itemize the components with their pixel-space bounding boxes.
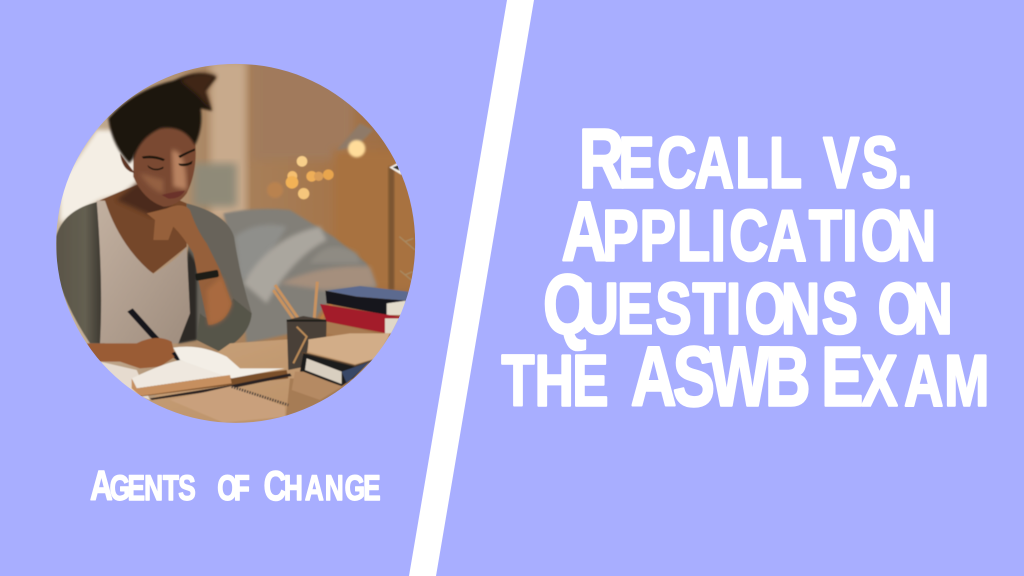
brand caption: C: [264, 461, 286, 509]
neck and chest: [97, 183, 187, 273]
hair: [108, 74, 216, 163]
brand caption: OF: [217, 468, 250, 508]
title line 4: XAM: [861, 341, 989, 422]
cardigan left: [56, 202, 105, 343]
brand caption: HANGE: [284, 468, 381, 508]
title line 1: VS.: [823, 123, 912, 204]
book stack, upper: [320, 286, 408, 337]
open book: [132, 347, 292, 400]
top: [97, 201, 190, 343]
brows, eyes and lips: [142, 148, 195, 170]
title line 4: THE: [502, 341, 608, 422]
title line 3: Q: [543, 258, 592, 352]
title line 1: ECALL: [618, 123, 802, 204]
title line 2: PPLICATION: [602, 196, 936, 277]
title line 1: R: [579, 112, 624, 206]
face: [133, 126, 196, 207]
book stack, lower: [292, 333, 390, 400]
brand caption: GENTS: [110, 468, 196, 508]
spiral notebook: [170, 386, 288, 423]
photo backdrop: warm room: [53, 60, 420, 427]
circular photo: woman studying at desk: [53, 60, 420, 427]
title line 4: [502, 330, 989, 424]
title line 1: [579, 112, 912, 206]
pencil holder with pencils: [273, 282, 338, 370]
title line 4: ASWB: [631, 330, 811, 424]
brand caption: [90, 461, 381, 509]
lamp and bokeh lights: [267, 123, 402, 290]
title line 4: E: [821, 330, 863, 424]
woman: [56, 73, 252, 368]
plant sprigs: [399, 237, 415, 282]
title line 3: UESTIONS: [580, 269, 858, 350]
title line 2: A: [562, 185, 607, 279]
title line 3: ON: [878, 269, 953, 350]
pen: [127, 308, 182, 363]
cardigan right and sleeve: [178, 203, 252, 352]
title: [502, 112, 989, 424]
title line 3: [543, 258, 953, 352]
desk: [100, 337, 407, 427]
brand caption: A: [90, 461, 113, 509]
diagonal white divider: [409, 0, 534, 576]
sofa with cushions: [223, 209, 377, 343]
hand on chin and forearm: [147, 205, 232, 325]
